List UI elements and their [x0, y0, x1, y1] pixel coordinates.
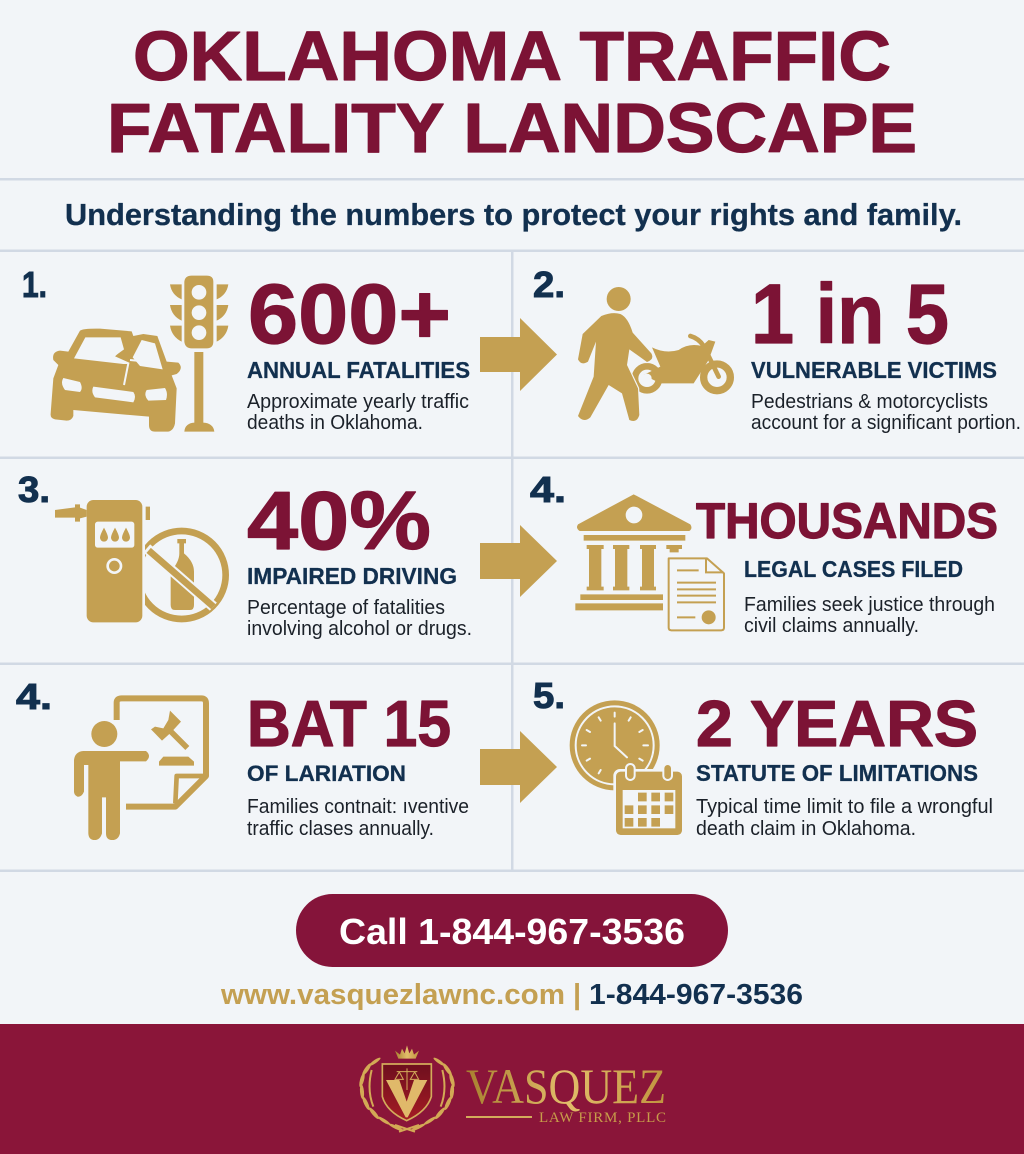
call button [296, 894, 728, 967]
description: Pedestrians & motorcyclists [751, 391, 988, 413]
panel: annual fatalities [22, 264, 470, 434]
title: FATALITY LANDSCAPE [107, 89, 917, 167]
icon: crashed car and traffic light [51, 276, 228, 432]
icon: pedestrian and motorcycle [578, 287, 730, 421]
step number 2: 2. [533, 264, 565, 305]
description [247, 796, 469, 840]
label: STATUTE OF LIMITATIONS [696, 760, 978, 786]
label: OF LARIATION [247, 761, 406, 786]
icon: clock and calendar [570, 700, 685, 838]
logo wordmark: VASQUEZ [466, 1058, 666, 1114]
description [696, 796, 993, 840]
logo [358, 1045, 666, 1132]
statistic: 600+ [248, 267, 451, 361]
website and phone: 1-844-967-3536 [589, 979, 803, 1011]
label: ANNUAL FATALITIES [247, 357, 470, 383]
description: deaths in Oklahoma. [247, 412, 423, 434]
step number 4: 4. [530, 469, 566, 510]
website and phone: www.vasquezlawnc.com [220, 979, 565, 1011]
description [744, 594, 995, 637]
label: IMPAIRED DRIVING [247, 563, 457, 589]
icon: person pointing at gavel document [74, 698, 206, 840]
label: LEGAL CASES FILED [744, 556, 963, 582]
footer band [0, 1024, 1024, 1154]
website and phone [220, 979, 803, 1011]
title [107, 17, 917, 167]
description: civil claims annually. [744, 615, 919, 637]
arrow 1 [480, 318, 557, 391]
step number 3: 3. [18, 469, 50, 510]
arrow 2 [480, 525, 557, 597]
panel: bat 15 [16, 676, 469, 840]
description: Percentage of fatalities [247, 597, 445, 619]
description: Families seek justice through [744, 594, 995, 616]
title: OKLAHOMA TRAFFIC [133, 17, 891, 95]
statistic: BAT 15 [247, 687, 451, 760]
panel: legal cases filed [530, 469, 998, 637]
description [751, 391, 1021, 434]
description [247, 597, 472, 640]
description: Approximate yearly traffic [247, 391, 469, 413]
statistic: 40% [247, 474, 431, 567]
website and phone: | [573, 979, 581, 1011]
subtitle: Understanding the numbers to protect your rights and family. [65, 197, 962, 232]
logo tagline: LAW FIRM, PLLC [539, 1110, 666, 1126]
statistic: THOUSANDS [696, 493, 998, 549]
call button: Call 1-844-967-3536 [339, 911, 685, 952]
panel: impaired driving [18, 469, 472, 640]
statistic: 2 YEARS [696, 687, 978, 760]
icon: courthouse and document [575, 494, 724, 630]
description: Typical time limit to file a wrongful [696, 796, 993, 818]
description: Families contnait: ıventive [247, 796, 469, 818]
statistic: 1 in 5 [751, 267, 949, 361]
description [247, 391, 469, 434]
step number 1: 1. [22, 264, 47, 305]
logo crest [358, 1045, 456, 1132]
arrow 3 [480, 731, 557, 803]
panel: statute of limitations [533, 675, 993, 840]
icon: breathalyzer and no alcohol [55, 497, 226, 625]
description: involving alcohol or drugs. [247, 618, 472, 640]
description: death claim in Oklahoma. [696, 818, 916, 840]
panel: vulnerable victims [533, 264, 1021, 434]
step number 4: 4. [16, 676, 52, 717]
label: VULNERABLE VICTIMS [751, 357, 997, 383]
step number 5: 5. [533, 675, 565, 716]
description: traffic clases annually. [247, 818, 434, 840]
